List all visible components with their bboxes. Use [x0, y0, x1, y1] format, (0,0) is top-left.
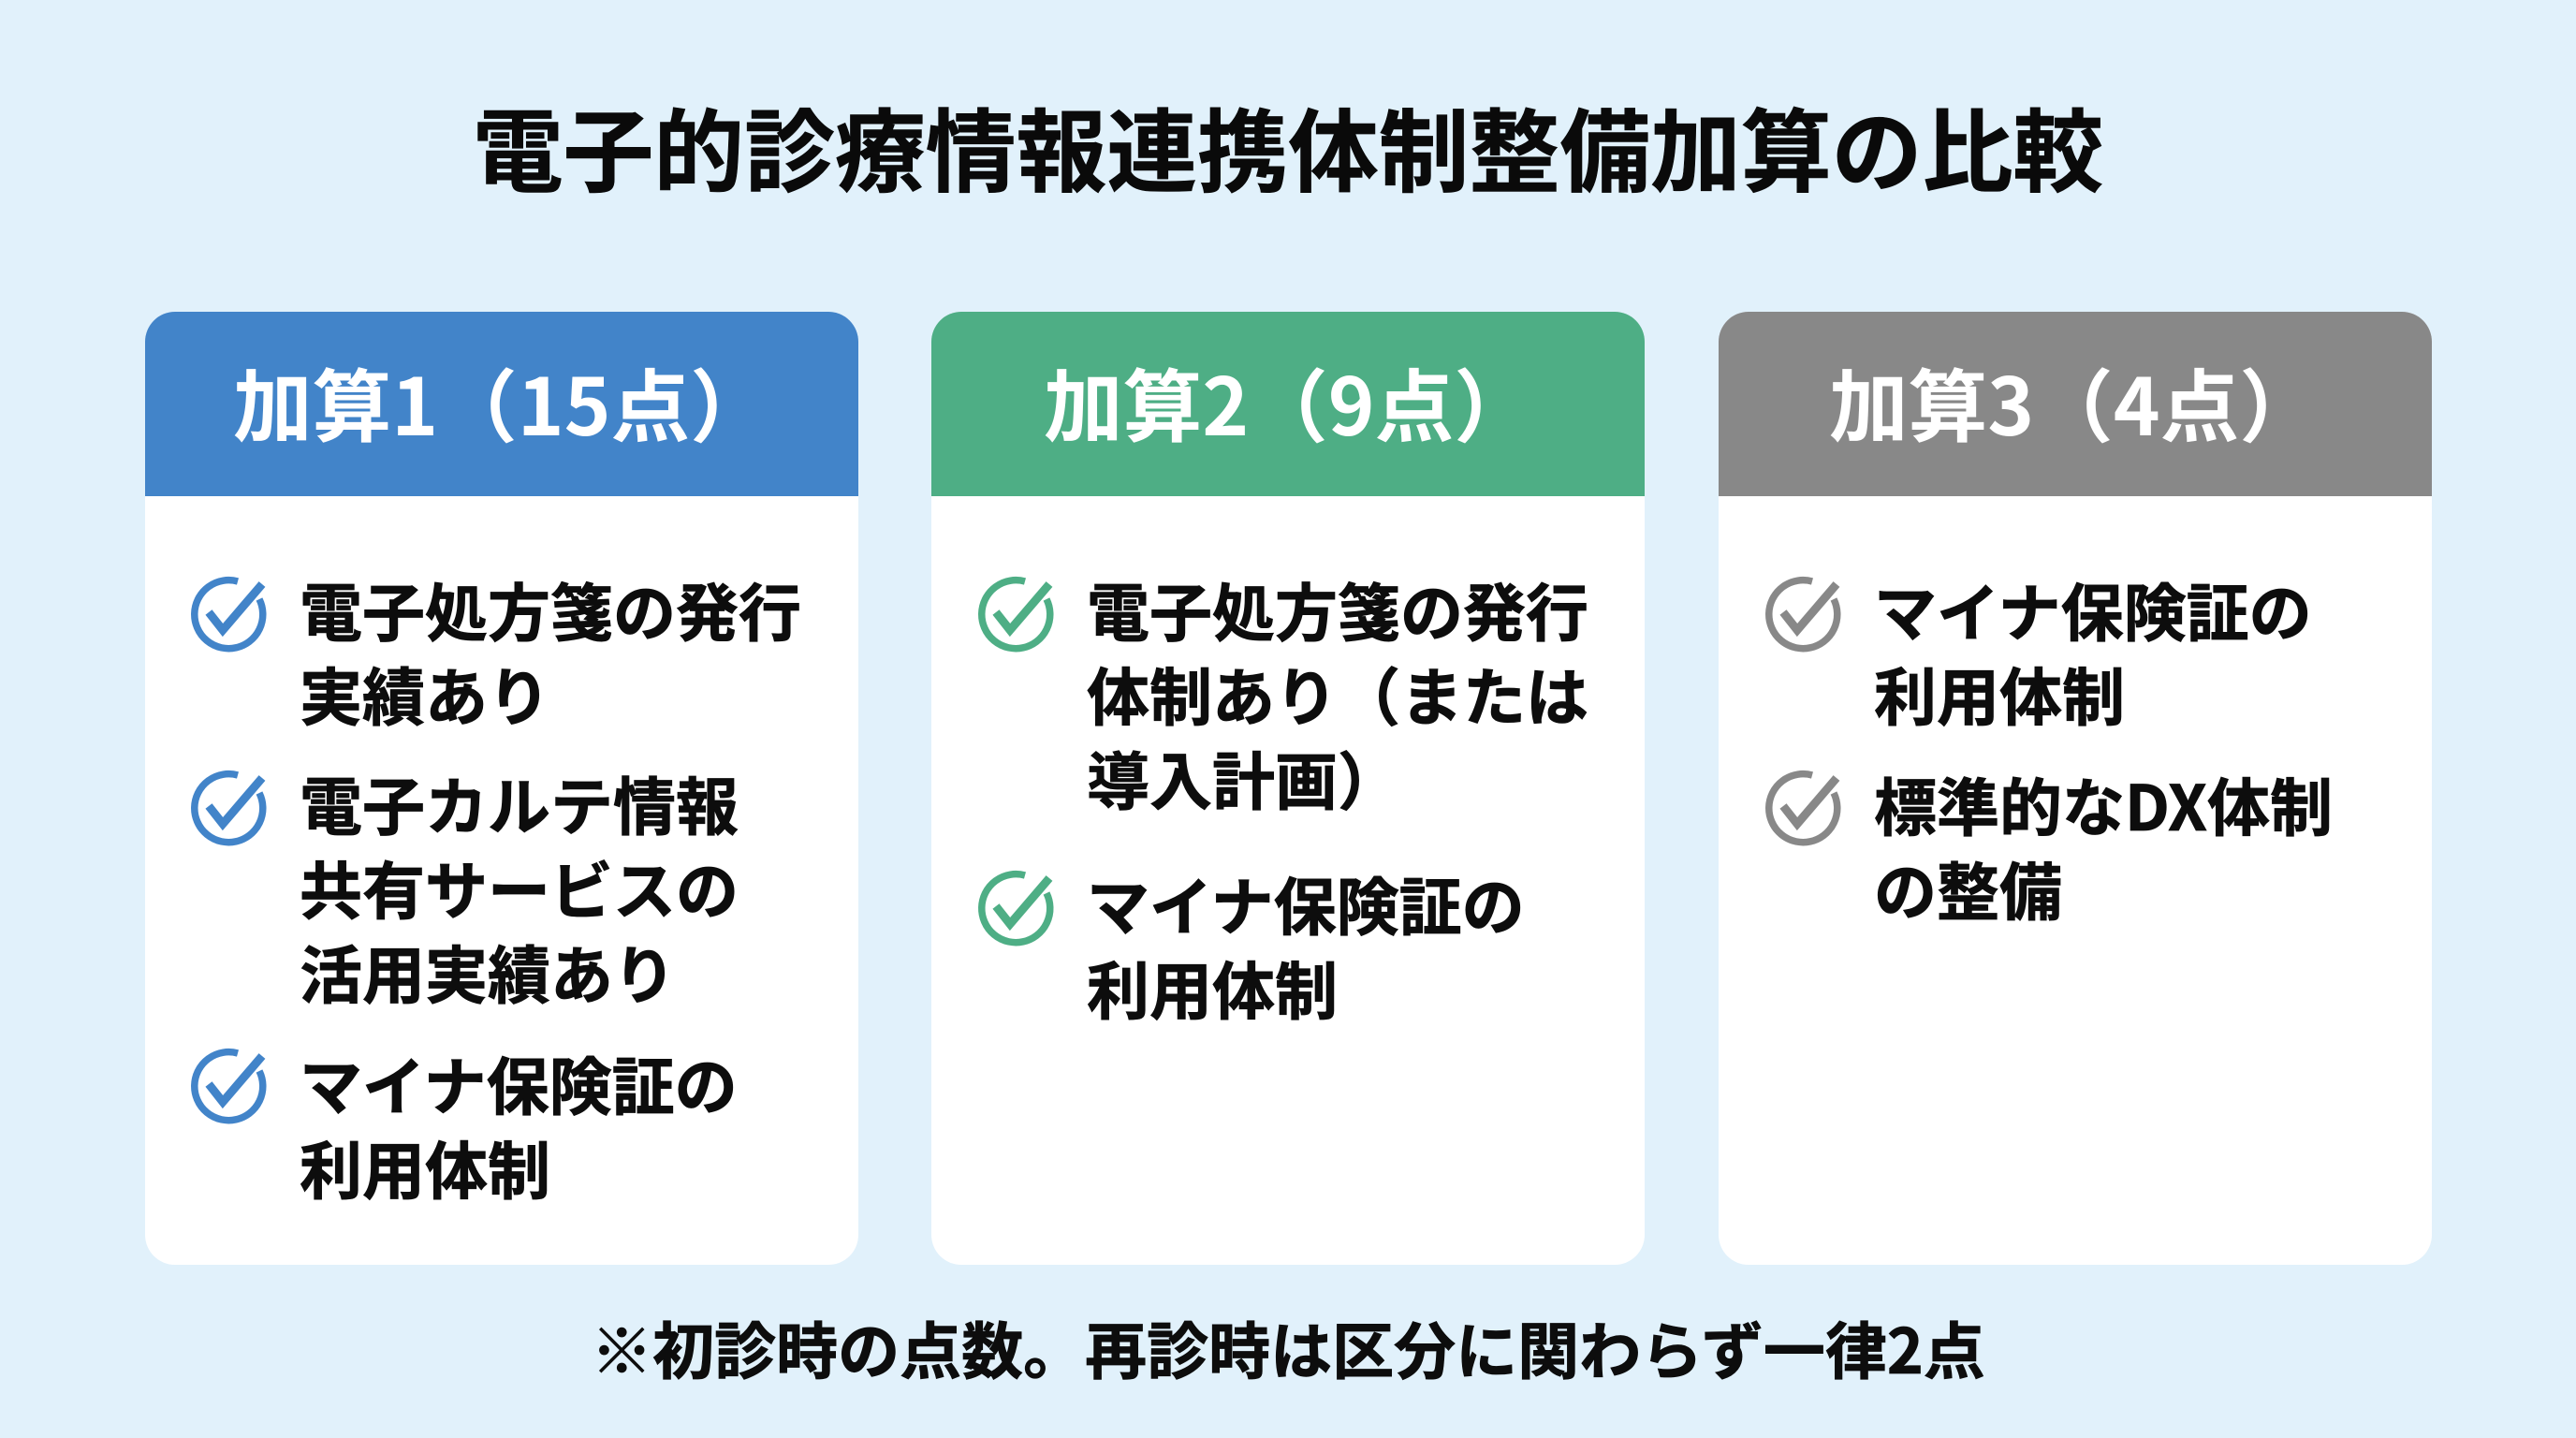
text: item 2-1	[1087, 564, 1588, 823]
text: item 3-2: 標準的なDX体制	[1874, 758, 2333, 849]
text: item 1-1: 電子処方箋の発行	[300, 564, 801, 654]
panel header: 加算2（9点）	[931, 312, 1645, 496]
text: item 2-1: 導入計画）	[1087, 732, 1400, 823]
text: item 1-1	[300, 564, 801, 739]
text: item 3-1: 利用体制	[1874, 648, 2125, 739]
panel header: 加算2（9点）: 加算2（9点）	[1044, 345, 1533, 459]
icon: check 1-1	[191, 577, 267, 652]
text: item 2-1: 電子処方箋の発行	[1087, 564, 1588, 654]
text: item 3-2: の整備	[1874, 843, 2062, 933]
text: item 1-1: 実績あり	[300, 648, 550, 739]
panel header: 加算3（4点）	[1719, 312, 2432, 496]
text: item 1-3: 利用体制	[300, 1122, 550, 1212]
icon: check 3-1	[1765, 577, 1840, 652]
text: item 2-2	[1087, 858, 1525, 1033]
icon: check 3-2	[1765, 770, 1840, 846]
icon: check 1-2	[191, 770, 267, 846]
panel header: 加算1（15点）: 加算1（15点）	[233, 345, 769, 459]
text: item 1-2: 活用実績あり	[300, 926, 676, 1017]
icon: check 2-1	[978, 577, 1054, 652]
footnote: ※初診時の点数。再診時は区分に関わらず一律2点	[591, 1302, 1985, 1392]
text: item 1-3: マイナ保険証の	[300, 1037, 738, 1128]
text: item 3-1	[1874, 564, 2312, 739]
panel: 加算1	[145, 312, 858, 1265]
panel header: 加算3（4点）: 加算3（4点）	[1829, 345, 2319, 459]
title: 電子的診療情報連携体制整備加算の比較	[473, 80, 2103, 211]
icon: check 1-3	[191, 1049, 267, 1123]
text: item 3-1: マイナ保険証の	[1874, 564, 2312, 654]
text: item 2-2: マイナ保険証の	[1087, 858, 1525, 948]
panel: 加算2	[931, 312, 1645, 1265]
text: item 2-1: 体制あり（または	[1087, 648, 1588, 739]
panel: 加算3	[1719, 312, 2432, 1265]
text: item 1-2: 共有サービスの	[300, 842, 739, 932]
text: item 1-2	[300, 757, 739, 1017]
text: item 3-2	[1874, 758, 2333, 933]
text: item 2-2: 利用体制	[1087, 942, 1338, 1033]
text: item 1-3	[300, 1037, 738, 1212]
text: item 1-2: 電子カルテ情報	[300, 757, 739, 848]
icon: check 2-2	[978, 871, 1054, 946]
panel header: 加算1（15点）	[145, 312, 858, 496]
